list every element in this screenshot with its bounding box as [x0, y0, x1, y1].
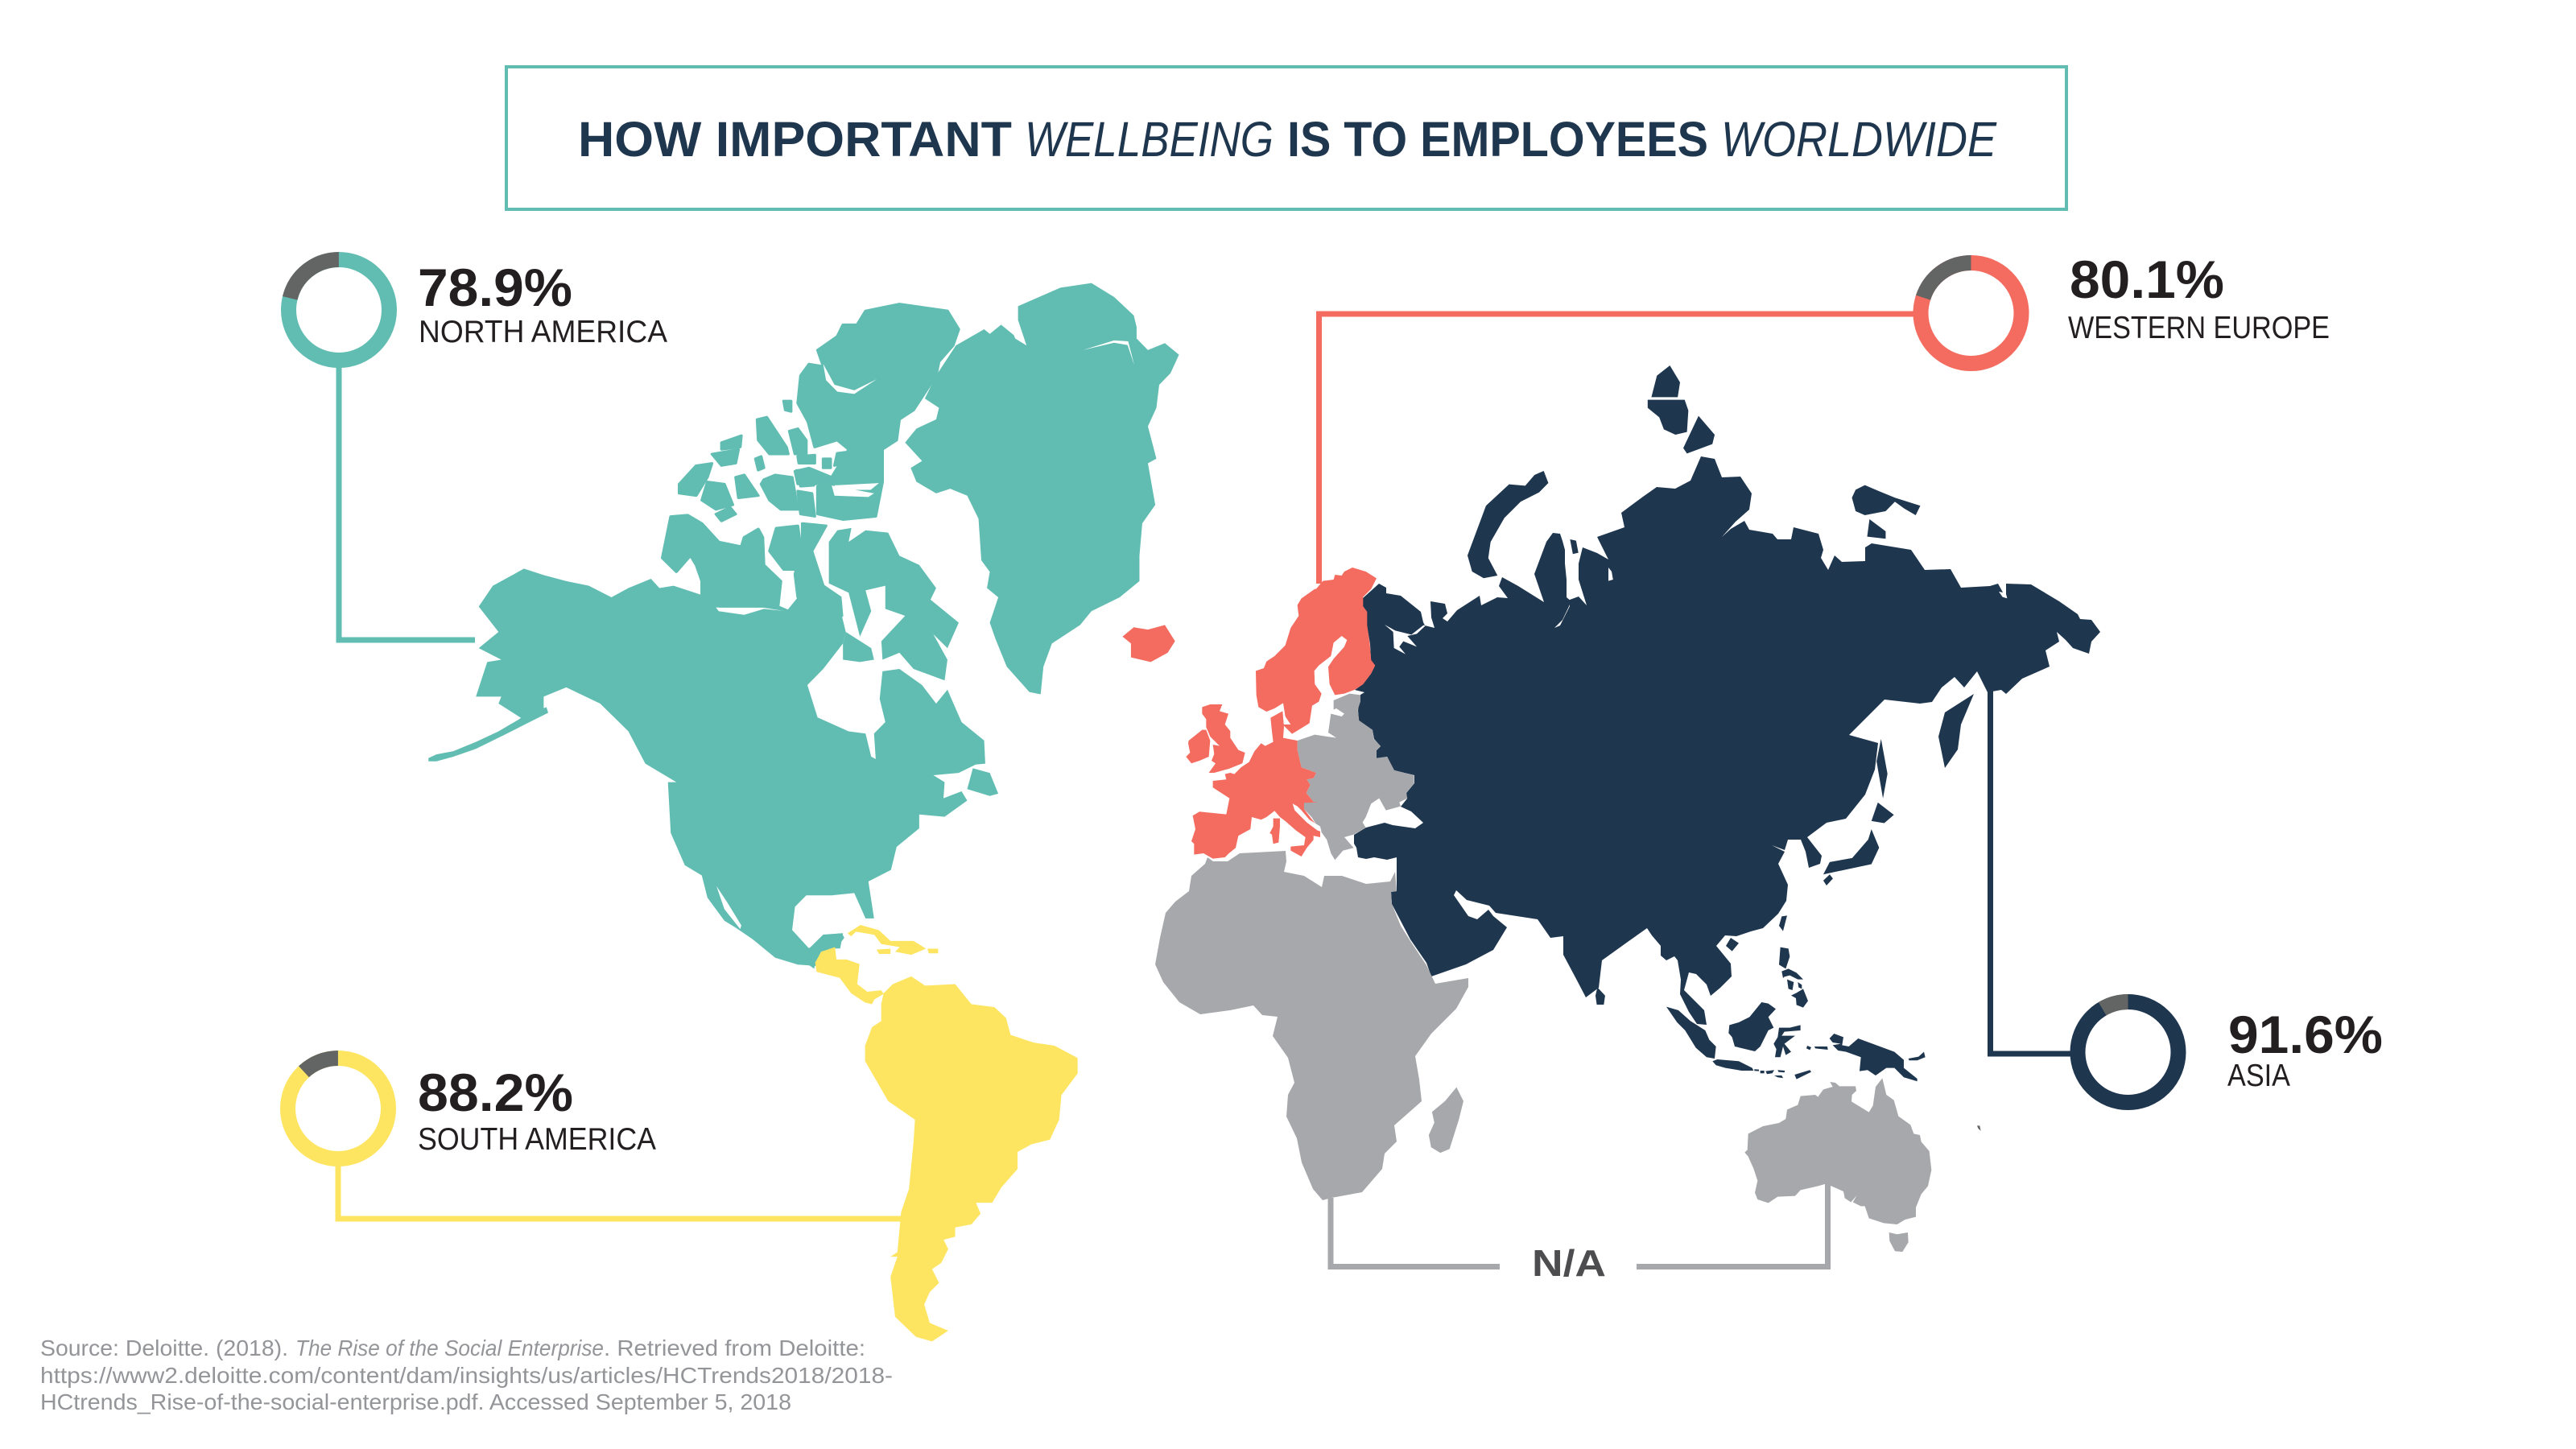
map: South America and Caribbean [805, 925, 1078, 1341]
Keewatin and Baffin [843, 632, 874, 662]
map: Asia [1354, 365, 2100, 1081]
title box: HOW IMPORTANT [578, 112, 1012, 167]
stat: Asia: ASIA [2227, 1059, 2290, 1093]
connector: Western Europe [1319, 314, 1916, 584]
Southeast Asian islands [1666, 915, 1926, 1081]
title box [506, 67, 2066, 209]
connector: Asia [1990, 690, 2073, 1054]
source note: https://www2.deloitte.com/content/dam/insights/us/articles/HCTrends2018/2018- [40, 1363, 893, 1388]
source note: The Rise of the Social Enterprise [295, 1335, 604, 1360]
Aleutian chain [428, 708, 548, 762]
Arctic islands [663, 303, 959, 616]
stat: South America [418, 1063, 656, 1157]
stat: Western Europe: WESTERN EUROPE [2068, 311, 2330, 345]
stat: Western Europe: 80.1% [2070, 250, 2224, 309]
Sakhalin and Kamchatka-side island [1938, 694, 1974, 768]
world map [428, 283, 2100, 1341]
stat: Asia [2227, 1005, 2383, 1093]
connector: North America [339, 362, 475, 640]
White Sea and Azov cut-outs [1385, 625, 1426, 802]
donut: North America 78.9% [278, 249, 400, 371]
source note [40, 1335, 893, 1414]
connector: South America [338, 1163, 903, 1219]
northern Asian inlets [1591, 538, 2007, 598]
Arctic islands of Russia [1468, 365, 1920, 578]
source note: Source: Deloitte. (2018). [40, 1335, 288, 1360]
stat: Asia: 91.6% [2228, 1005, 2383, 1064]
title box: WORLDWIDE [1721, 112, 1997, 167]
connector: N/A left [1331, 1198, 1500, 1267]
map: North America and Greenland [428, 283, 1179, 966]
stat: South America: SOUTH AMERICA [418, 1122, 656, 1157]
water cut-outs [716, 324, 1134, 929]
stat: Western Europe [2068, 250, 2330, 345]
Greenland [905, 283, 1179, 695]
map: Eastern Europe [1298, 694, 1414, 860]
stat: South America: 88.2% [418, 1063, 573, 1122]
donut: Asia 91.6% [2059, 984, 2197, 1121]
map: Australia [1744, 1078, 1981, 1252]
Newfoundland [968, 768, 998, 796]
map: Africa [1155, 851, 1468, 1200]
donut: Western Europe 80.1% [1907, 250, 2035, 377]
connector: N/A right [1637, 1182, 1827, 1267]
title box: WELLBEING [1025, 112, 1274, 167]
donut: South America 88.2% [267, 1038, 409, 1179]
Japan and eastern islands [1596, 739, 1894, 1005]
title box: IS TO EMPLOYEES [1287, 112, 1708, 167]
map: Western Europe [1186, 568, 1377, 859]
stat: North America: NORTH AMERICA [419, 315, 667, 349]
source note: . Retrieved from Deloitte: [604, 1335, 865, 1360]
map: Iceland [1122, 625, 1175, 662]
stat: North America [418, 258, 667, 349]
stat: North America: 78.9% [418, 258, 572, 317]
Madagascar [1429, 1088, 1463, 1153]
label: N/A: N/A [1532, 1242, 1606, 1284]
source note: HCtrends_Rise-of-the-social-enterprise.pdf. Accessed September 5, 2018 [40, 1389, 791, 1414]
